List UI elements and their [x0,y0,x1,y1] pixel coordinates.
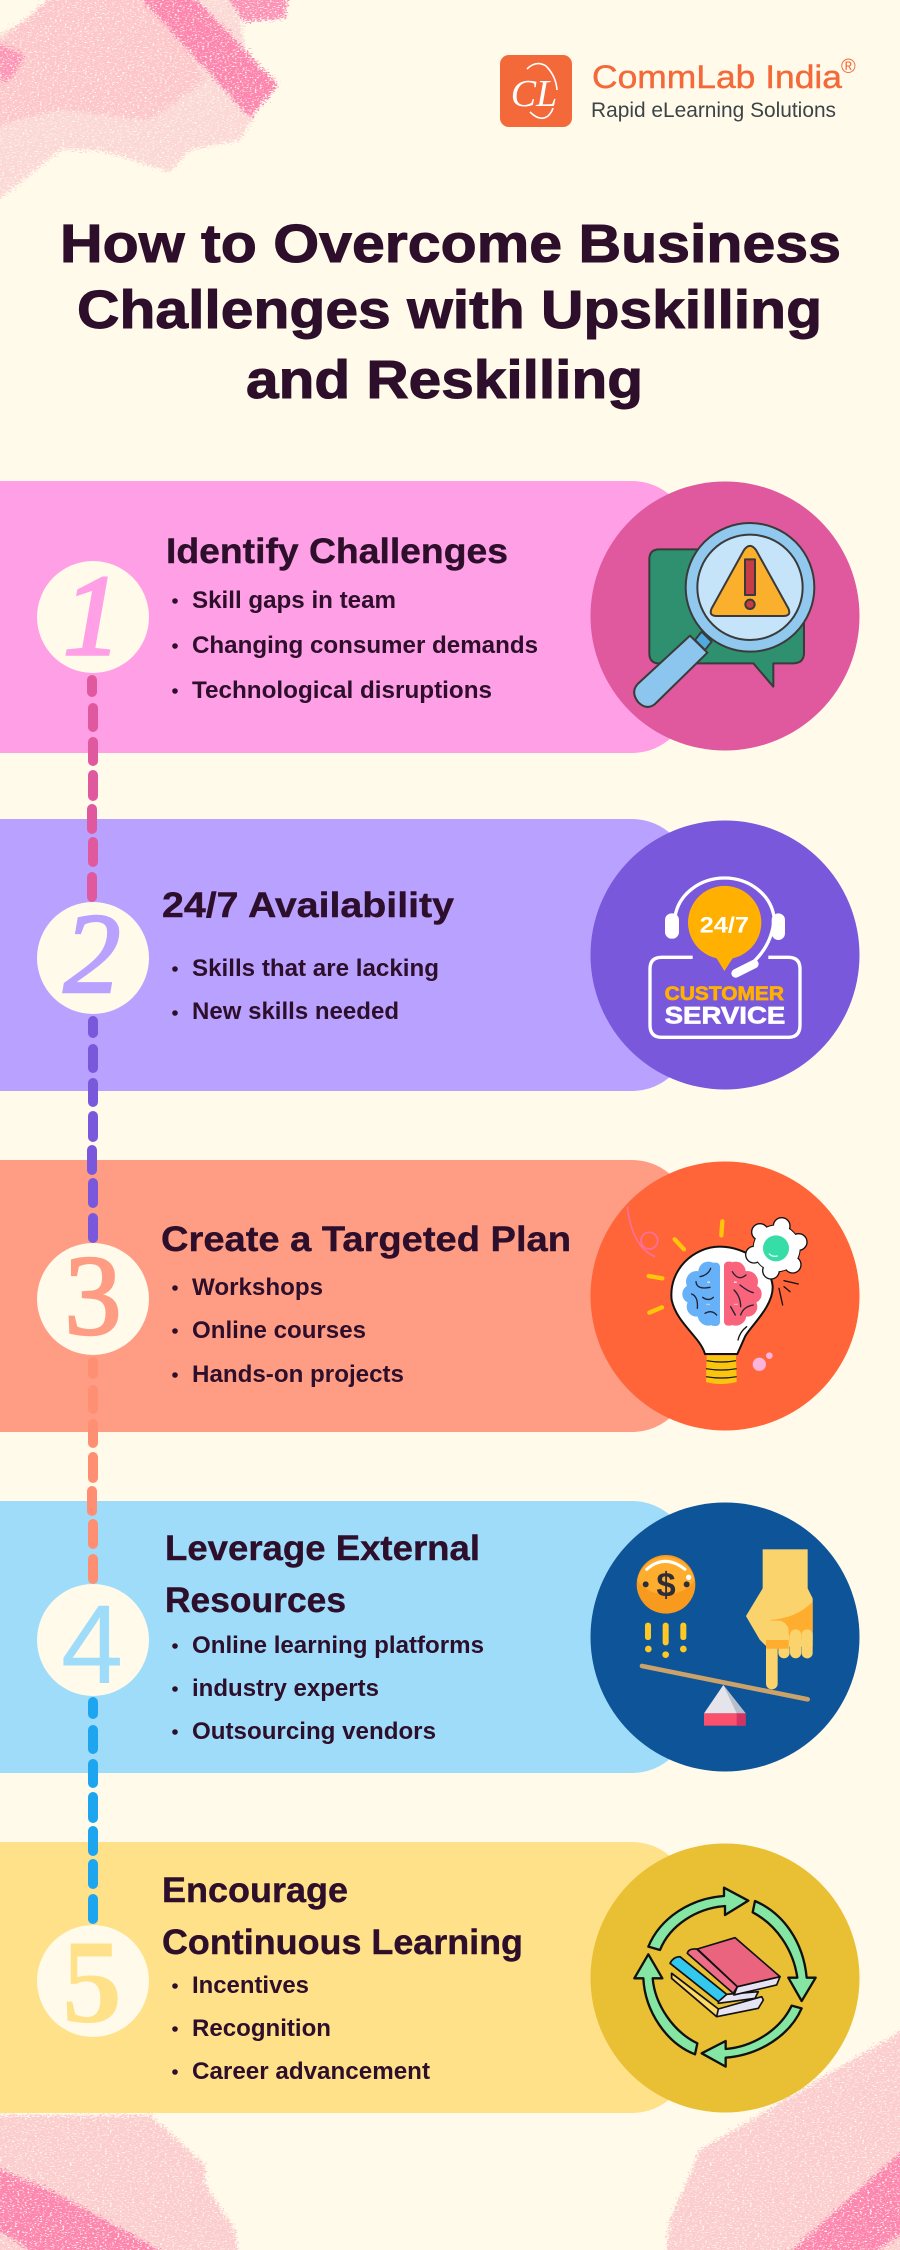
number badge 3 [37,1232,149,1359]
number badge 1 [37,552,149,679]
icon: customer service headset: 24/7 [700,913,749,938]
title: and Reskilling [246,350,643,410]
step 4 text: Resources [165,1581,346,1620]
step 2 text: New skills needed [192,998,399,1025]
step 3 text: Workshops [192,1274,323,1301]
step 5 text: Recognition [192,2015,331,2042]
panel: step 3 band [0,1160,690,1432]
step 3 text: Hands-on projects [192,1361,404,1388]
icon: coin and seesaw with hand [637,1549,813,1726]
icon circle 2 [590,820,860,1090]
panel: step 2 band [0,819,690,1091]
step 4 text: Outsourcing vendors [192,1718,436,1745]
icon circle 1 [590,482,860,750]
icon: coin and seesaw with hand: $ [656,1567,676,1605]
logo wordmark: CommLab India [592,59,842,95]
icon: customer service headset [650,878,800,1037]
step 1 text: Technological disruptions [192,677,492,704]
number badge 4 [37,1582,149,1707]
step 5 text: Career advancement [192,2058,430,2085]
title: How to Overcome Business [60,214,841,274]
step 4 text: Leverage External [165,1529,480,1568]
dashed connector 2 to 3 [92,1021,93,1238]
panel: step 1 band [0,481,690,753]
dashed connector 1 to 2 [92,680,93,897]
registered mark: ® [841,56,856,78]
step 1 text: Skill gaps in team [192,587,396,614]
icon: customer service headset: CUSTOMER [665,984,784,1005]
step 4 text: Online learning platforms [192,1632,484,1659]
icon circle 5 [590,1844,860,2112]
logo tagline: Rapid eLearning Solutions [591,99,836,122]
step 4 text [165,1529,484,1745]
step 1 text [166,532,538,704]
step 3 text: Create a Targeted Plan [161,1220,571,1259]
icon: customer service headset: SERVICE [665,1002,785,1029]
step 5 text: Continuous Learning [162,1923,523,1962]
logo [500,55,856,127]
icon circle 4 [590,1502,860,1772]
step 4 text: industry experts [192,1675,379,1702]
number badge 2: 2 [64,890,120,1017]
step 2 text [162,886,455,1025]
number badge 4: 4 [61,1582,123,1707]
icon: books with cycle arrows [634,1888,816,2067]
panel: step 4 band [0,1501,690,1773]
title [60,214,841,410]
icon: light bulb brain and gear [627,1207,808,1384]
icon circle 3 [590,1162,860,1430]
step 5 text: Incentives [192,1972,309,1999]
panel: step 5 band [0,1842,690,2113]
brush stroke: top left [0,0,290,215]
dashed connector 4 to 5 [88,1702,98,1919]
brush stroke: bottom right [665,2020,900,2250]
title: Challenges with Upskilling [77,280,822,340]
step 3 text [161,1220,571,1388]
step 3 text: Online courses [192,1317,366,1344]
brush stroke: bottom left [0,2115,240,2250]
step 2 text: 24/7 Availability [162,886,455,925]
number badge 1: 1 [64,552,120,679]
step 1 text: Identify Challenges [166,532,508,571]
icon: magnifier over warning [634,523,814,707]
logo mark [500,55,572,127]
number badge 3: 3 [64,1232,122,1359]
number badge 5: 5 [62,1915,122,2048]
step 2 text: Skills that are lacking [192,955,439,982]
logo mark: CL [511,73,557,115]
step 5 text: Encourage [162,1871,348,1910]
step 1 text: Changing consumer demands [192,632,538,659]
step 5 text [162,1871,523,2085]
dashed connector 3 to 4 [92,1362,93,1579]
number badge 5 [37,1915,149,2048]
number badge 2 [37,890,149,1017]
